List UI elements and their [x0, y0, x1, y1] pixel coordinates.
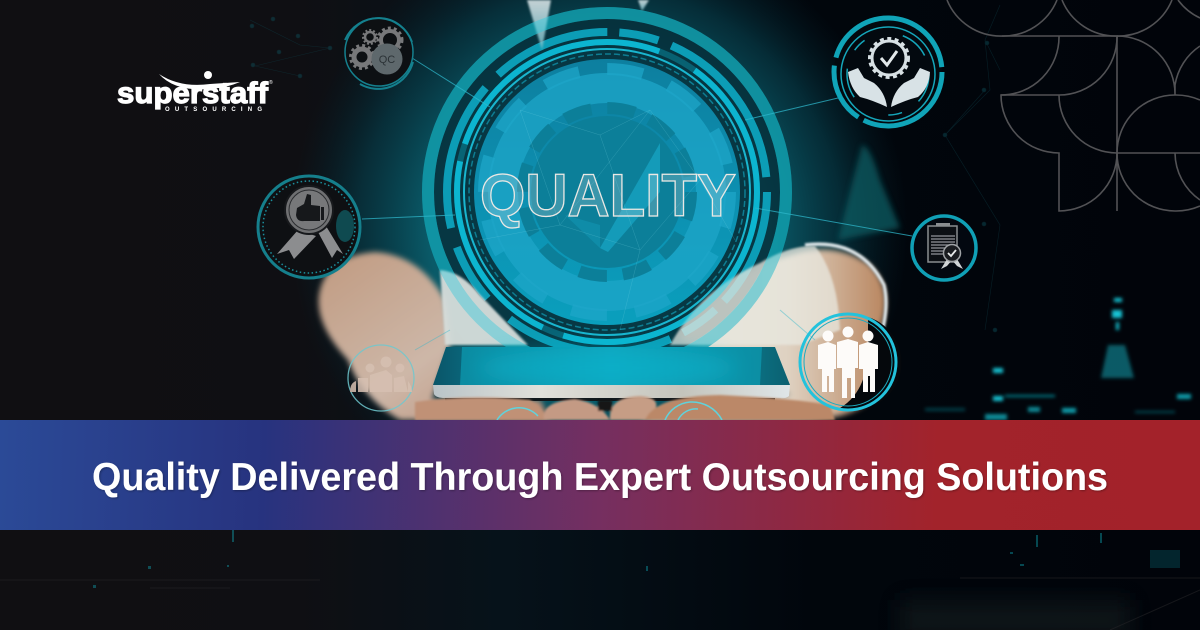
geometric line pattern — [947, 0, 1200, 211]
tie tips at the top — [527, 0, 649, 50]
logo: superstaff outsourcing: ® — [269, 79, 273, 86]
connector lines — [362, 58, 912, 350]
hologram outer rings — [428, 13, 786, 371]
left hand — [319, 252, 550, 420]
title banner: Quality Delivered Through Expert Outsourcing Solutions — [92, 456, 1108, 499]
hologram disc with gears — [474, 59, 740, 330]
suit and lapel hint — [838, 145, 900, 240]
icon: team of people — [800, 314, 902, 410]
icon: hands holding gear check — [834, 18, 942, 126]
right hand — [640, 249, 886, 420]
icon: faded team on left hand — [348, 345, 414, 411]
hologram word: QUALITY: QUALITY — [480, 162, 736, 229]
title banner — [0, 420, 1200, 530]
logo: superstaff outsourcing: superstaff — [117, 77, 269, 110]
tablet — [433, 347, 790, 401]
icon: thumbs up award — [258, 176, 360, 278]
logo: superstaff outsourcing: OUTSOURCING — [165, 107, 265, 113]
icon fragments on the fingers — [497, 402, 722, 420]
icon: certificate clipboard — [912, 216, 976, 280]
decorative city lights — [93, 298, 1191, 588]
fingers under the tablet — [415, 395, 835, 420]
shirt cuffs — [440, 246, 840, 345]
icon: QC gears: QC — [379, 54, 395, 66]
ring overlay on cuffs — [428, 13, 786, 371]
icon: QC gears — [345, 18, 413, 89]
